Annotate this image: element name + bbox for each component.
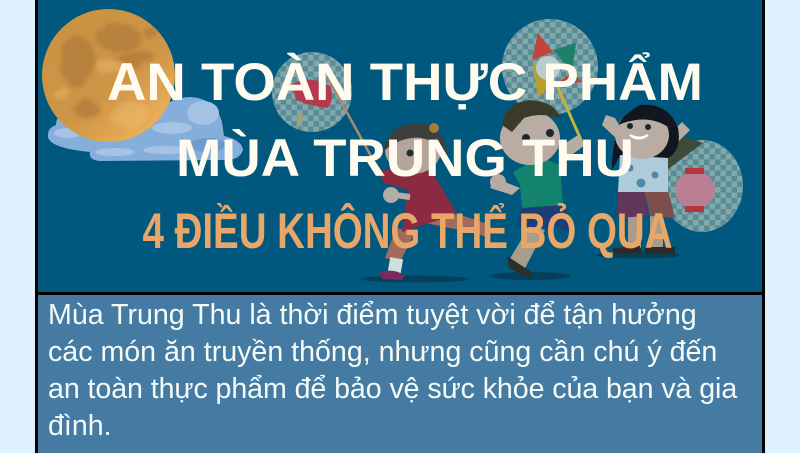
- icon: cloud: [48, 97, 243, 161]
- text block: introduction: đình.: [48, 410, 112, 442]
- illustration: girl in red dress: [378, 123, 490, 280]
- text block: introduction: [48, 299, 738, 442]
- illustration: boy with star lantern: [490, 100, 585, 278]
- illustration: ground shadows: [360, 252, 680, 282]
- icon: fish lantern on pole: [272, 52, 372, 158]
- text block: introduction: Mùa Trung Thu là thời điểm tuyệt vời để tận hưởng: [48, 299, 697, 331]
- title: [107, 53, 703, 188]
- icon: full moon: [42, 9, 175, 142]
- illustration: girl waving: [602, 105, 703, 254]
- icon: round lantern: [661, 140, 743, 232]
- banner background: [38, 0, 762, 292]
- title line 1: AN TOÀN THỰC PHẨM: [107, 53, 703, 112]
- title line 2: MÙA TRUNG THU: [176, 129, 634, 188]
- text block: introduction: an toàn thực phẩm để bảo vệ sức khỏe của bạn và gia: [48, 373, 737, 405]
- text block: introduction: các món ăn truyền thống, nhưng cũng cần chú ý đến: [48, 336, 717, 368]
- panel: hero banner: [38, 0, 762, 295]
- icon: star lantern: [502, 19, 598, 142]
